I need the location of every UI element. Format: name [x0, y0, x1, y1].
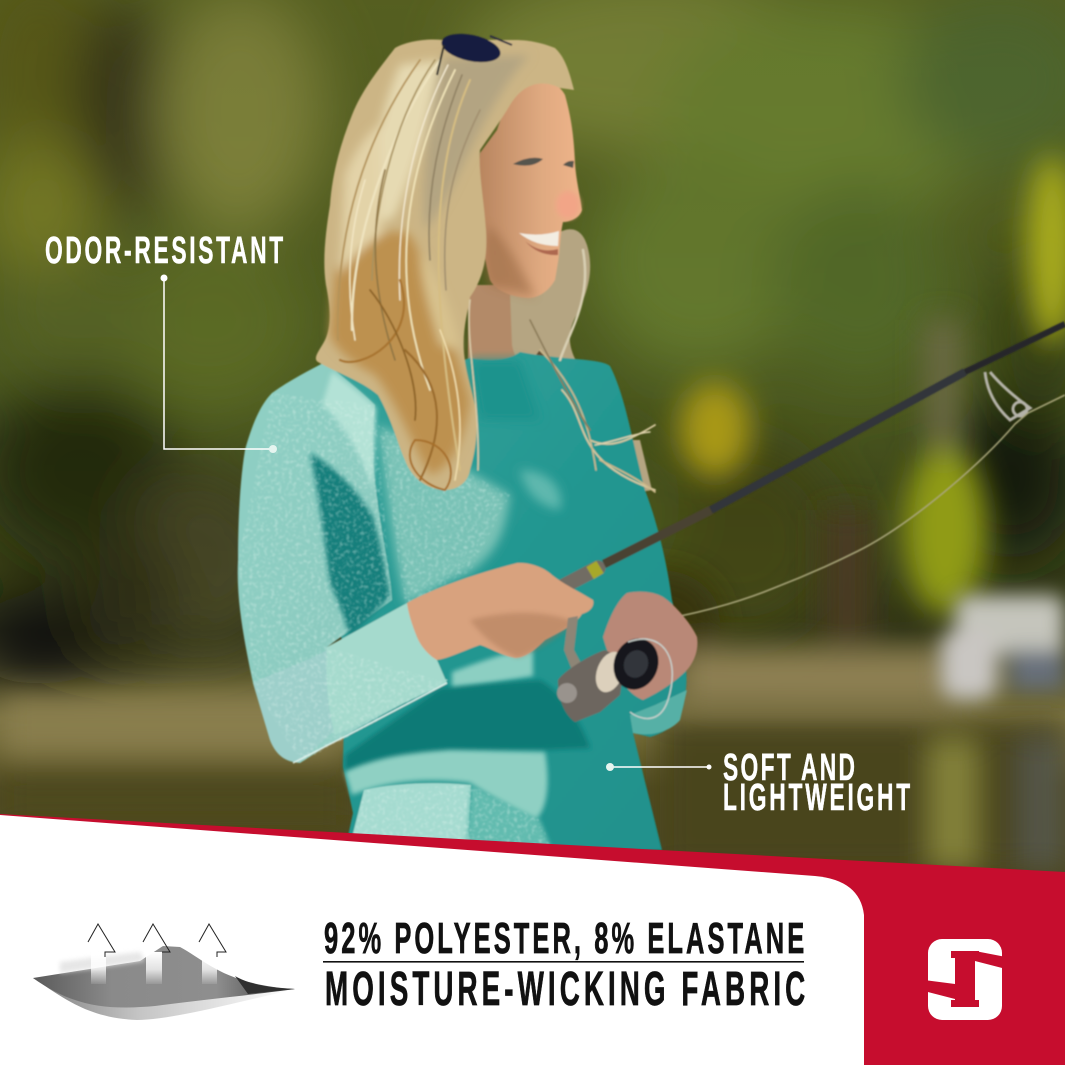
- label: odor-resistant: ODOR-RESISTANT: [45, 229, 283, 271]
- reel knob: [557, 683, 577, 703]
- sunglasses on head: [437, 29, 512, 75]
- leader dot: label end: [706, 764, 712, 770]
- divider rule: [323, 961, 804, 963]
- shirt dark shadow: [345, 680, 590, 772]
- shirt lower pale patches: [345, 750, 552, 850]
- fabric dark tip: [235, 976, 295, 994]
- spool cream line: [591, 648, 629, 696]
- fabric raised highlight: [60, 952, 145, 973]
- heading: fabric composition: 92% POLYESTER, 8% ELASTANE: [324, 913, 804, 963]
- fabric top layer: [33, 946, 295, 1008]
- hair: main mass: [316, 39, 574, 490]
- nose highlight: [556, 191, 580, 219]
- label: lightweight: LIGHTWEIGHT: [723, 776, 910, 818]
- red angled band: [0, 814, 1065, 1065]
- reel body: [558, 650, 625, 722]
- reel: [557, 616, 672, 722]
- shirt pale band under forearm: [452, 650, 533, 690]
- smile: teeth: [519, 231, 559, 246]
- lower lip: [525, 241, 558, 255]
- hair behind the neck: [510, 229, 652, 492]
- hair: colour shading: [330, 55, 530, 475]
- forearm seam: [293, 683, 447, 763]
- heading: moisture-wicking fabric: MOISTURE-WICKING FABRIC: [325, 962, 805, 1016]
- fishing rod: [556, 324, 1065, 590]
- leader line: odor-resistant: [164, 278, 273, 449]
- elbow smooth area: [253, 650, 335, 762]
- callout: soft and lightweight: [606, 746, 910, 818]
- shirt torso: [300, 352, 687, 850]
- callout: odor-resistant: [45, 229, 283, 453]
- leader dot: shirt: [269, 445, 277, 453]
- neck: [468, 285, 516, 360]
- right hand: [603, 592, 697, 700]
- leader line: soft and lightweight: [610, 766, 709, 768]
- arrow 3: [199, 924, 226, 984]
- hair strands: [338, 60, 655, 492]
- icon: moisture-wicking fabric: [33, 924, 295, 1020]
- hand shadow: [470, 613, 575, 658]
- fabric lower layer: [33, 978, 295, 1020]
- shirt fabric texture: [238, 393, 552, 850]
- arrow 1: [88, 924, 115, 984]
- label: soft and: SOFT AND: [723, 746, 855, 788]
- sleeve: raised arm and shoulder: [238, 362, 448, 763]
- right sleeve cuff: [630, 690, 687, 734]
- sleeve shoulder highlight strip: [322, 372, 376, 490]
- far eye: [563, 161, 574, 168]
- hair dark lock: [531, 350, 595, 470]
- logo: S brand mark: [924, 939, 1006, 1020]
- leader dot: top: [160, 274, 168, 282]
- fishing line: [655, 395, 1065, 620]
- face shadow: cheek and jaw: [485, 225, 535, 297]
- left hand: [407, 563, 593, 660]
- forearm cuff: [326, 603, 447, 735]
- sleeve fold shadow: [310, 453, 390, 637]
- shirt highlights upper chest: [470, 360, 561, 510]
- bail wire: [628, 639, 672, 719]
- white information panel: [0, 815, 864, 1065]
- spool face: [606, 632, 666, 696]
- shirt chest light patch: [378, 425, 510, 604]
- arrow 2: [143, 924, 170, 984]
- woman: fishing figure: [238, 29, 1065, 850]
- leader dot: shirt: [606, 763, 614, 771]
- rod guide: [985, 372, 1030, 420]
- eye: [513, 158, 543, 166]
- face: [479, 77, 582, 298]
- reel arm: [564, 616, 582, 670]
